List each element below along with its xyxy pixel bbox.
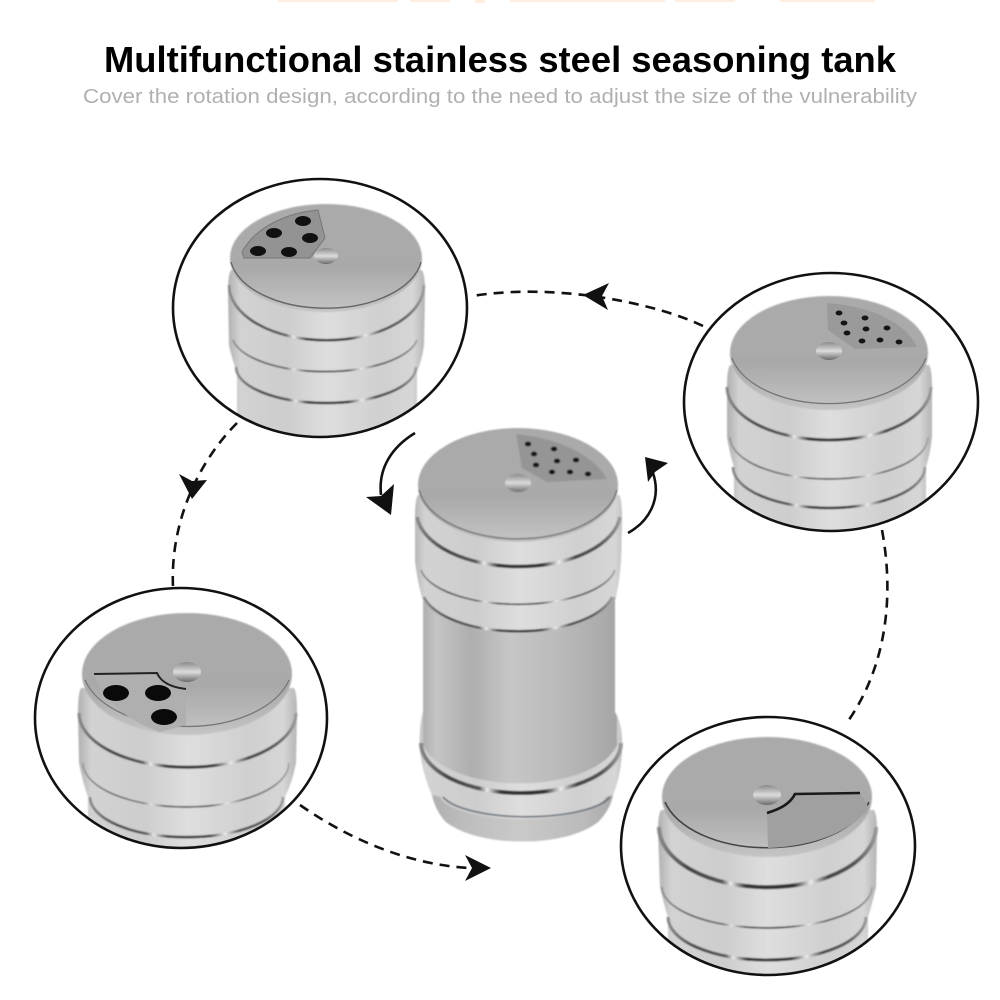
arrow: dashed, bottom right to top right [846,530,887,724]
open sector [94,673,186,732]
shaker perforated sector [516,434,607,482]
lid top [730,296,928,410]
shaker base [432,794,614,842]
lid body [78,688,297,855]
perforated sector [827,303,917,349]
sector edge [767,793,860,813]
knob [173,662,201,682]
open sector [767,793,869,848]
circle outline [35,588,327,848]
lid body [658,810,877,985]
perforated sector [242,210,325,258]
circle outline [684,273,978,531]
three holes [103,685,177,725]
lid body [228,270,425,445]
lid top [662,737,872,857]
shaker rings [417,517,621,817]
panel: bottom right detail, open slot [621,717,915,985]
knob [753,785,781,805]
clipped heading remnant at top edge [278,0,875,3]
lid body [727,365,932,540]
shaker silhouette with main body [414,494,623,842]
shaker knob [505,474,531,492]
knob [816,342,842,360]
arrow: dashed, top right to top left [472,283,703,326]
circle outline [621,717,915,975]
arrow: dashed, left to bottom right [300,805,491,881]
title: Multifunctional stainless steel seasoning tank [104,39,897,80]
panel: left detail, three large holes [35,588,327,855]
shaker lower band [420,714,622,820]
knob [314,248,338,264]
five holes [250,216,318,257]
sector edge [94,673,186,689]
lid top [82,613,292,735]
lid top [230,204,422,312]
panel: top left detail, five large holes [173,179,467,445]
panel: top right detail, nine small holes [684,273,978,540]
arrow: rotate right of centre shaker [628,457,668,533]
arrow: rotate left of centre shaker [366,433,415,515]
arrow: dashed, top left to left [173,423,237,587]
shaker holes [525,442,591,476]
centre shaker [410,428,630,850]
circle outline [173,179,467,437]
nine holes [836,310,902,344]
shaker upper band [415,494,622,631]
subtitle: Cover the rotation design, according to the need to adjust the size of the vulnerability [83,86,917,108]
shaker lid [418,428,618,542]
